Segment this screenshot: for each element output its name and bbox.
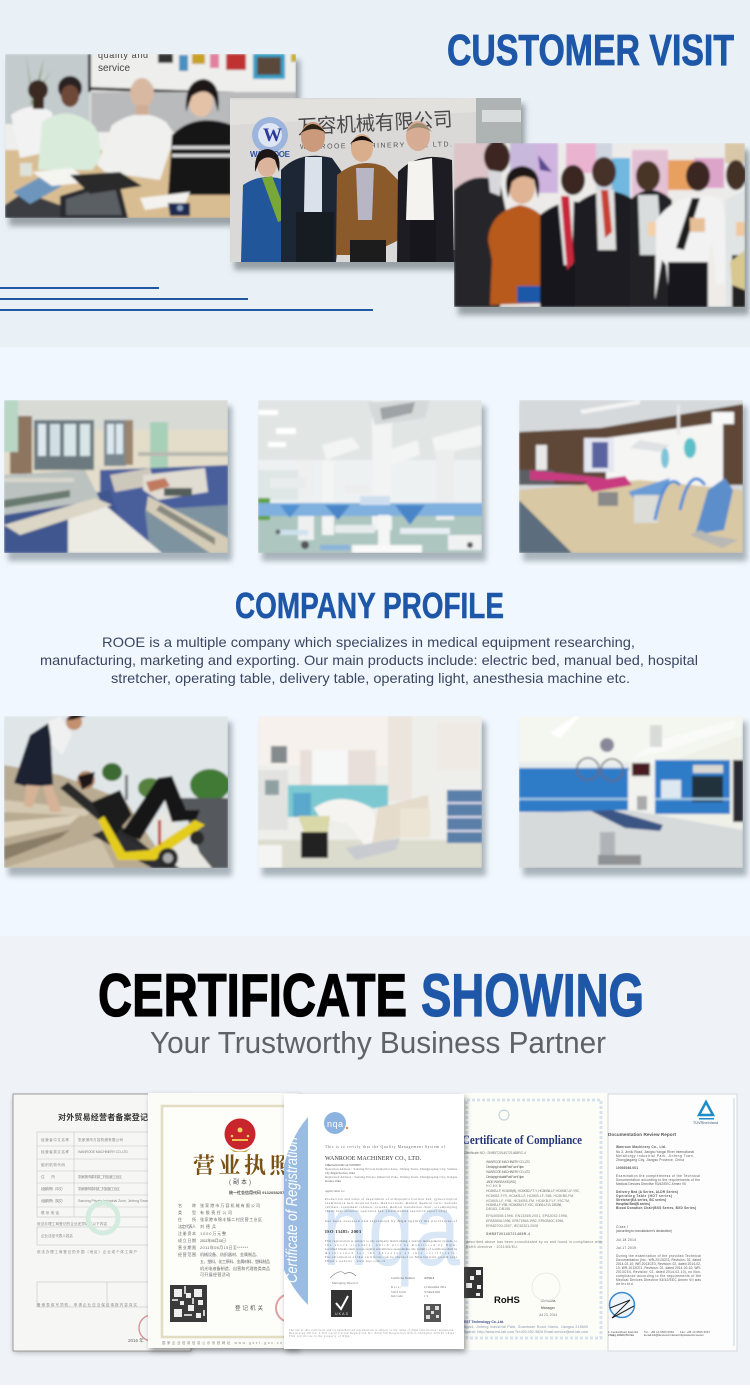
- certificate: foreign trade registration form: 张家港市万容机械有限公司: [78, 1137, 123, 1142]
- certificate: RoHS certificate of compliance: Certificate NO.: SHB5T20140721468RC-4: [464, 1151, 526, 1155]
- certificate: foreign trade registration form: Sanxing Private Industrial Zone, Jinfeng Town: [78, 1199, 148, 1203]
- certificate: RoHS certificate of compliance: WANROOE MACHINERY CO.,LTD: [486, 1160, 531, 1164]
- certificate: NQA ISO 13485 registration: Date:: [391, 1286, 401, 1289]
- certificate: documentation review report: Tel.: +86 10 6566 6660: [644, 1330, 674, 1334]
- photo: infant incubators room: [258, 400, 486, 561]
- certificate: documentation review report: compliance according to the requirements of the: [616, 1274, 701, 1278]
- qr code: nqa: [424, 1304, 441, 1322]
- certificate: RoHS certificate of compliance: WANROOE MACHINERY CO.,LTD: [486, 1170, 531, 1174]
- certificate: business licence: 住 所: [178, 1216, 196, 1222]
- certificates group: [13, 1093, 737, 1352]
- photo: operating theatre with blue walls: [519, 716, 747, 876]
- certificate: business licence: 机光电液备制造、自营和代理各类商品: [200, 1265, 270, 1271]
- certificate: business licence: 法定代表人: [178, 1223, 196, 1229]
- certificate: NQA ISO 13485 registration: City, Jiangsu Province, China: [325, 1172, 356, 1175]
- certificate: NQA ISO 13485 registration: Certified Clients shall accept regular surveillance assessments, the validity of certificate shall be: [325, 1248, 458, 1251]
- certificate: business licence: 张家港市万容机械有限公司: [200, 1202, 260, 1208]
- text block: company description: [40, 634, 698, 686]
- certificate: documentation review report: Class I: [616, 1225, 628, 1229]
- certificate: documentation review report: Documentation (No.: WR-2013CE3, Revision: 02, dated: [616, 1258, 701, 1262]
- heading: certificate showing: SHOWING: [421, 962, 644, 1029]
- certificate: NQA ISO 13485 registration: 19: [424, 1295, 429, 1298]
- certificate: NQA ISO 13485 registration: Province, China: [325, 1180, 342, 1183]
- certificate: business licence: 1000万元整: [200, 1230, 226, 1236]
- certificate: RoHS certificate of compliance: EST Technology Co.,Ltd.: [464, 1320, 504, 1324]
- text block: company description: stretcher, operating table, delivery table, operating light, anesthesia machine etc.: [111, 670, 630, 686]
- certificate: foreign trade registration form: 联系电话: [41, 1210, 59, 1215]
- watermark: nqa letters: nqa: [322, 1172, 460, 1288]
- certificate: business licence: 可开展经营活动: [200, 1271, 230, 1277]
- icon: national emblem: [224, 1118, 256, 1152]
- certificate: documentation review report: detected.: [616, 1282, 634, 1286]
- certificate: RoHS certificate of compliance: DB183, DB198: [486, 1207, 510, 1211]
- certificate: RoHS certificate of compliance: JADE WASEA KB (WD): [486, 1180, 516, 1184]
- certificate: foreign trade registration form: 住 所: [41, 1174, 55, 1179]
- heading: company profile: COMPANY PROFILE: [235, 585, 504, 626]
- certificate: NQA ISO 13485 registration: has been assessed and registered by NQA against the provisions of: [325, 1219, 458, 1223]
- certificate: documentation review report: Hospital Bed(B series): [616, 1202, 650, 1206]
- certificate: documentation review report: Metallurgy Industrial Park, Jinfeng Town,: [616, 1154, 694, 1158]
- certificate: business licence: 登记机关: [235, 1304, 265, 1312]
- certificate: business licence: 营业执照: [193, 1153, 295, 1178]
- certificate: business licence: 五、塑料、化工原料、金属材料、塑料制品: [200, 1258, 270, 1264]
- certificate: documentation review report: 2. Beijing, 100022, P.R.China: [608, 1333, 634, 1337]
- certificate: NQA ISO 13485 registration: ISO 13485: 2003: [325, 1229, 362, 1234]
- certificate: foreign trade registration form: 经营场所（中文）: [41, 1186, 65, 1191]
- certificate: documentation review report: Operating Table (HOT series): [616, 1194, 672, 1198]
- certificate: business licence: 注册资本: [178, 1230, 196, 1236]
- subheading: trustworthy partner: Your Trustworthy Business Partner: [150, 1025, 606, 1060]
- certificate: NQA ISO 13485 registration: The use of this certificate and its unauthorised reproduction is subject to the terms of NQA certification regulations.: [289, 1329, 454, 1332]
- certificate: business licence: 有限责任公司: [200, 1209, 232, 1215]
- photo: visitors at company logo wall: WANROOE MACHINERY CO., LTD.: [300, 141, 452, 151]
- certificate: business licence: 机械设备、纺织器材、金属制品、: [200, 1251, 260, 1257]
- certificate: NQA ISO 13485 registration: This certificate is the property of NQA: [289, 1335, 349, 1338]
- certificate: NQA ISO 13485 registration: INQA's website : www.nqa.com.cn: [325, 1260, 386, 1263]
- certificate: RoHS certificate of compliance: Certificate of Compliance: [462, 1133, 582, 1147]
- certificate: RoHS certificate of compliance: [460, 1093, 608, 1350]
- certificate: RoHS certificate of compliance: EPA3060A:1996, EPA7196A:1992, EPA3540C:1996,: [486, 1219, 564, 1223]
- certificate: NQA ISO 13485 registration: This is to certify that the Quality Management System of: [325, 1145, 446, 1149]
- certificate: documentation review report: Delivery Bed (A Series, ALDR Series): [616, 1190, 678, 1194]
- certificate: NQA ISO 13485 registration: maintained for the purposes of this certificate.: [325, 1252, 457, 1255]
- certificate: RoHS certificate of compliance: HC6KB-LF-Y9B, HC6KB5-FM, HC6KB-FLF-Y9C7M,: [486, 1199, 570, 1203]
- certificate: documentation review report: Documentation Review Report: [608, 1132, 676, 1137]
- certificate: RoHS certificate of compliance: HC6KB2-FY9, HC6KB-LF, HC6KB-LF-Y6B, HC6KB5-FM,: [486, 1194, 574, 1198]
- qr code: licence: [170, 1285, 207, 1322]
- heading: certificate showing: CERTIFICATE: [98, 962, 407, 1029]
- icon: TUV logo: [693, 1102, 718, 1125]
- certificate: RoHS certificate of compliance: HC6KB: [486, 1184, 502, 1188]
- certificate: foreign trade registration form: 备案表填写须知，申请企业应当保证填报内容真实: [37, 1302, 137, 1307]
- side arc with vertical title: Certificate of Registration: [284, 1137, 301, 1283]
- certificate: documentation review report: Zhangjiagang City, Jiangsu Province, China: [616, 1158, 684, 1162]
- certificate: NQA ISO 13485 registration: WANROOE MACHINERY CO., LTD.: [325, 1156, 422, 1162]
- certificate: NQA ISO 13485 registration: [284, 1094, 466, 1352]
- certificate: documentation review report: No.3, Jinxiu Road, Jiangsu Yangzi River International: [616, 1150, 694, 1154]
- certificate: foreign trade registration form: 依法办理工商登记的企业还须填写以下内容: [37, 1221, 107, 1226]
- certificate: business licence: 2011年06月15日至******: [200, 1244, 248, 1250]
- certificate: documentation review report: Jul.17.2019: [616, 1246, 636, 1250]
- certificate: RoHS certificate of compliance: described above has been consolidated by us and found in compliance with: [466, 1240, 602, 1244]
- certificate: foreign trade registration form: 张家港市锦丰镇二村民营工业区: [78, 1186, 120, 1191]
- certificate: RoHS certificate of compliance: EPA3050B:1996, EN1326B:2001, EPA3052:1996,: [486, 1214, 568, 1218]
- certificate: NQA ISO 13485 registration: IAC Code:: [391, 1295, 403, 1298]
- icon: accreditation mark: [331, 1290, 352, 1317]
- certificate: RoHS certificate of compliance: SHB5T20140721468R-4: [486, 1232, 530, 1236]
- photo: visitors at company logo wall: W: [263, 125, 282, 146]
- certificate: NQA ISO 13485 registration: 31 March 2019: [424, 1291, 441, 1294]
- photo: hospital ward with beds: [4, 400, 232, 561]
- certificate: NQA ISO 13485 registration: Certificate Number: [391, 1276, 415, 1280]
- text block: company description: manufacturing, marketing and exporting. Our main products include: electric bed, manual bed, hospital: [40, 652, 698, 668]
- certificate: RoHS certificate of compliance: Search: http://www.est-lab.com Tel:400-052-9826 Email:service@est-lab.com: [464, 1330, 588, 1334]
- certificate: NQA ISO 13485 registration: 21 December 2014: [424, 1286, 447, 1289]
- certificate: documentation review report: Wanrooe Machinery Co., Ltd.: [616, 1145, 666, 1149]
- photo: visitors at company logo wall: [230, 98, 525, 270]
- section background: company profile: [0, 347, 750, 936]
- certificate: foreign trade registration form: 经营者英文名称: [41, 1149, 69, 1154]
- photo: visitors at company logo wall: 万容机械有限公司: [297, 108, 453, 139]
- certificate: documentation review report: 10; WR-2013CE1, Revision: 02, dated 2014-02-10; WR-: [616, 1266, 701, 1270]
- certificate: documentation review report: (according to manufacturer's declaration): [616, 1229, 672, 1233]
- certificate: business licence: 经营范围: [178, 1251, 196, 1257]
- section background: certificates: [0, 936, 750, 1385]
- certificate: business licence: 成立日期: [178, 1237, 196, 1243]
- certificate: documentation review report: Documentation according to the requirements of the: [616, 1178, 700, 1182]
- certificate: foreign trade registration form: [13, 1094, 192, 1352]
- certificate: foreign trade registration form: 对外贸易经营者备案登记表: [58, 1112, 156, 1122]
- certificate: documentation review report: Medical Devices Directive 93/42/EEC Annex VII was: [616, 1278, 701, 1282]
- side arc with vertical title: [284, 1117, 308, 1305]
- certificate: business licence: (副本): [229, 1178, 253, 1186]
- certificate: NQA ISO 13485 registration: examination bed, hospital beds, medical beds, manual medical carts, bedside: [325, 1201, 458, 1206]
- photo: delivery room with blue tables: [519, 400, 747, 561]
- certificate: RoHS certificate of compliance: Christina: [541, 1299, 555, 1303]
- certificate: documentation review report: During the examination of the provided Technical: [616, 1254, 701, 1258]
- certificate: documentation review report: 2014-02-10; WR-2013CE3, Revision: 02, dated 2014-02-: [616, 1262, 701, 1266]
- certificate: foreign trade registration form: WANROOE MACHINERY CO.,LTD: [78, 1150, 128, 1154]
- text block: company description: ROOE is a multiple company which specializes in medical equipment researching,: [102, 634, 635, 650]
- photo: visitors at company logo wall: WANROOE: [250, 150, 291, 159]
- certificate: documentation review report: Jul.18.2014: [616, 1238, 636, 1242]
- certificate: RoHS certificate of compliance: HC6KB-LF, HC6KB(B), HC6KB2-FT-Y, HC6KB6-LF, HC6KB7-LF-Y9C,: [486, 1189, 580, 1193]
- certificate: NQA ISO 13485 registration: applicable to:: [325, 1189, 345, 1193]
- certificate: NQA ISO 13485 registration: Registered Address : Sanxing Private Industrial Zone, Jinfeng Town, Zhangjiagang City, Jiangsu: [325, 1176, 458, 1179]
- certificate: NQA ISO 13485 registration: The information of this certificate can be checked on NQA bulletin system page: [325, 1256, 458, 1259]
- certificate: NQA ISO 13485 registration: Registered Office: 4 Nsf Certification Regulation No. 8230 5th Regulation Office Shanghai 200120 China: [289, 1332, 455, 1335]
- certificate: documentation review report: [608, 1094, 737, 1351]
- certificate: documentation review report: Stretcher(EA series, BC series): [616, 1198, 666, 1202]
- certificate: foreign trade registration form: 张家港市锦丰镇二村民营工业区: [78, 1174, 122, 1179]
- certificate: documentation review report: Examination the completeness of the Technical: [616, 1174, 700, 1178]
- logo: nqa: nqa: [327, 1119, 343, 1129]
- photo: stair stretcher in use: [4, 714, 232, 876]
- certificate: NQA ISO 13485 registration: cabinets, equipment cabinets, screens, medical transfusion chair, accompanying: [325, 1205, 457, 1210]
- certificate: NQA ISO 13485 registration: 42563: [424, 1276, 434, 1280]
- certificate: documentation review report: 2013CE4, Revision: 02, dated 2014-02-10), no Non-: [616, 1270, 701, 1274]
- certificate: NQA ISO 13485 registration: Managing Director: [332, 1281, 358, 1285]
- certificate: business licence: 国家企业信用信息公示系统网址 www.gsxt.gov.cn: [162, 1340, 282, 1345]
- certificate: foreign trade registration form: 经营者中文名称: [41, 1137, 69, 1142]
- certificate: RoHS certificate of compliance: Dinxiuqing Industrial Park Fuan Fujian: [486, 1165, 524, 1169]
- certificate: documentation review report: Fax: +86 10 6566 6667: [680, 1330, 710, 1334]
- certificate: business licence: 刘德兵: [200, 1223, 216, 1229]
- certificate: business licence: 名 称: [178, 1202, 196, 1208]
- certificate: foreign trade registration form: 2016 年: [128, 1337, 144, 1344]
- decorative blue lines: [0, 287, 373, 311]
- section background: customer visit: [0, 0, 750, 347]
- photo: customer meeting at table: [5, 50, 300, 226]
- certificate: business licence: 2011年06月15日: [200, 1237, 226, 1243]
- certificate: RoHS certificate of compliance: EPA8270D:2007, IEC62321:2008: [486, 1224, 538, 1228]
- photo: ICU hospital room: [258, 716, 486, 876]
- certificate: NQA ISO 13485 registration: Operation Address : Sanxing Private Industrial Zone, Jinfeng Town, Zhangjiagang City, Suzhou: [325, 1168, 458, 1171]
- certificate: foreign trade registration form: 组织机构代码: [41, 1162, 65, 1167]
- certificate: RoHS certificate of compliance: RoHS: [494, 1295, 520, 1306]
- stamp: TUV round seal: [610, 1292, 634, 1318]
- certificate: foreign trade registration form: 经营场所（英文）: [41, 1198, 65, 1203]
- qr code: compliance: [464, 1267, 483, 1298]
- certificate: foreign trade registration form: 企业法定代表人姓名: [41, 1233, 73, 1238]
- certificate: RoHS certificate of compliance: RoHS directive : 2011/65/EU.: [466, 1245, 518, 1249]
- poster text: quality and: [98, 50, 148, 60]
- certificate: business licence: 营业期限: [178, 1244, 196, 1250]
- logo: nqa: [324, 1112, 348, 1134]
- certificate: business licence: 张家港市锦丰镇二村民营工业区: [200, 1216, 262, 1222]
- certificate: foreign trade registration form: 依法办理工商登记的外国（地区）企业或个体工商户: [37, 1249, 137, 1254]
- certificate: RoHS certificate of compliance: Manager: [541, 1306, 556, 1310]
- certificate: RoHS certificate of compliance: Block, Jinfeng Industrial Park, Guanhuan Road, Nanlu, Jiangsu 215600: [464, 1325, 588, 1329]
- certificate: documentation review report: Blood Donation Chair(BXS Series, BXD Series): [616, 1206, 696, 1210]
- icon: TUV logo: TÜVRheinland: [693, 1121, 718, 1125]
- certificate: NQA ISO 13485 registration: the above standard, which will be monitored by NQA.: [325, 1244, 457, 1247]
- certificate: RoHS certificate of compliance: Dinxiuqing Industrial Park Fuan Fujian: [486, 1175, 524, 1179]
- certificate: documentation review report: 1. Central Road, East 3rd: [608, 1330, 638, 1334]
- certificate: business licence: [148, 1093, 304, 1351]
- certificate: NQA ISO 13485 registration: Unified Social Credit Code : 9132058257: [325, 1164, 362, 1167]
- photo: group of visitors at trade show: [454, 141, 749, 315]
- certificate: RoHS certificate of compliance: Jul 23, 2014: [539, 1313, 557, 1317]
- certificate: documentation review report: 10003046.001: [616, 1166, 638, 1170]
- certificate: documentation review report: E-mail: info@de.tuv.com Internet: http://www.chn.tuv.com: [644, 1333, 705, 1337]
- certificate: NQA ISO 13485 registration: chair, bed, obstetric operation bed. (sterilization operation report only): [325, 1209, 447, 1214]
- certificate: NQA ISO 13485 registration: Valid Until: [391, 1291, 406, 1294]
- certificate: business licence: 类 型: [178, 1209, 196, 1215]
- certificate: business licence: 统一社会信用代码 9132058257: [229, 1189, 285, 1195]
- certificate: documentation review report: Medical Devices Directive 93/42/EEC Annex VII: [616, 1182, 686, 1186]
- certificate: NQA ISO 13485 registration: This registration is subject to the company maintaining a quality management system, to: [325, 1240, 458, 1243]
- certificate: RoHS certificate of compliance: HC6KB-LF-Y9B, HC6KB5-FLF-Y9C, GDB5-LF-B, DB396,: [486, 1203, 562, 1207]
- certificate: NQA ISO 13485 registration: Production and sales of department of orthopedics traction bed, gynecological: [325, 1197, 457, 1202]
- icon: accreditation mark: UKAS: [335, 1312, 349, 1316]
- photo: customer meeting at table: service: [98, 63, 130, 74]
